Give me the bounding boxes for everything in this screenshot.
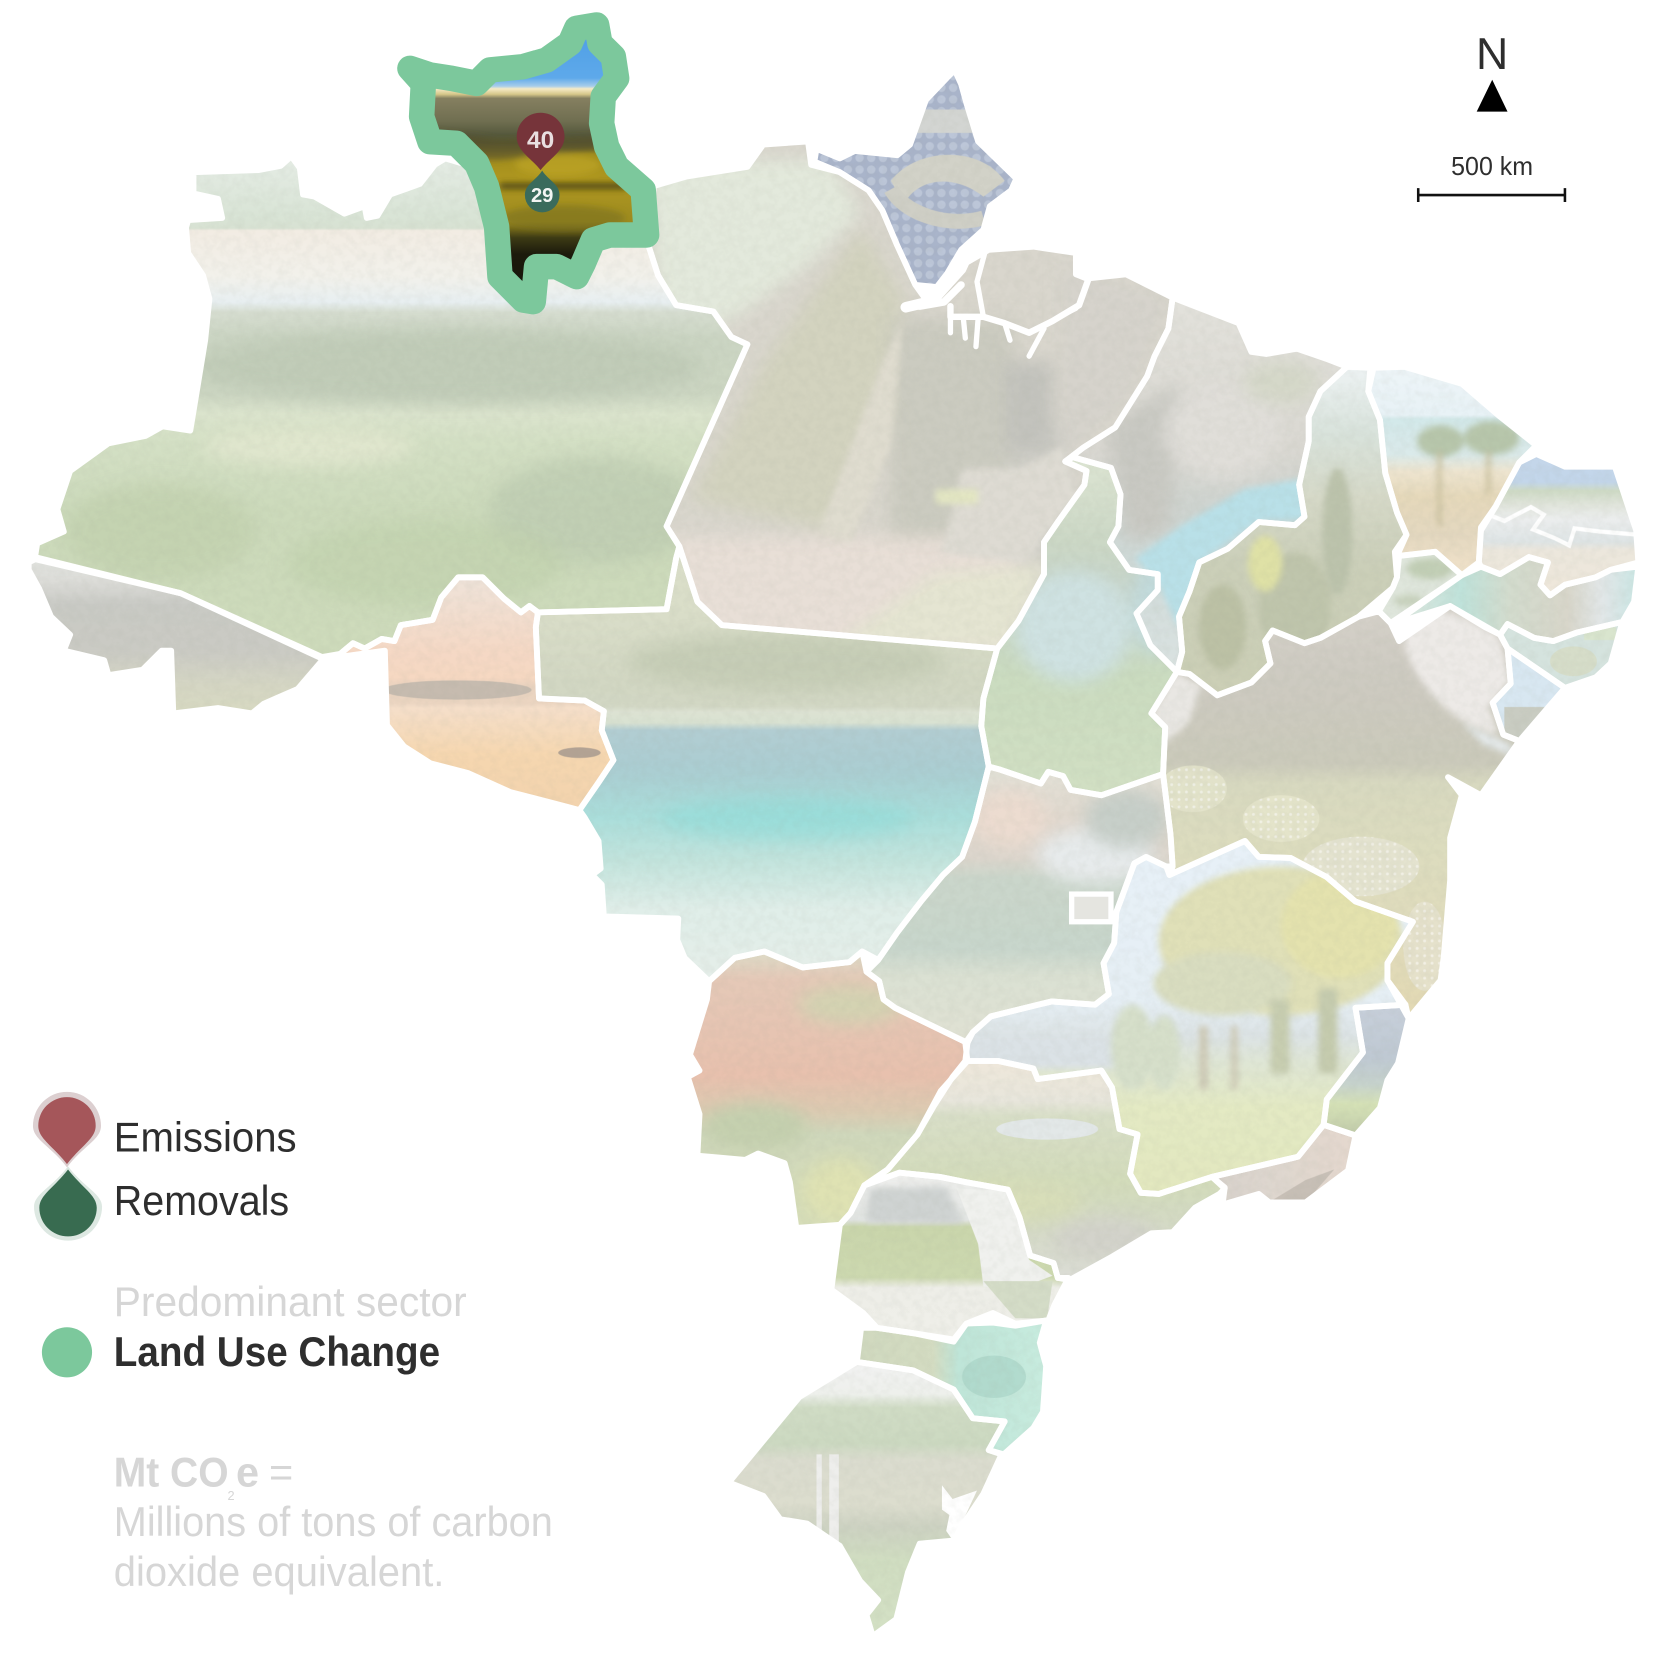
- Roraima green outline: land use change: [410, 25, 647, 302]
- legend: removals: Removals: [114, 1177, 289, 1224]
- Amazon river mouth channels: [906, 238, 1089, 356]
- lagoon in Rio Grande do Sul: [942, 1485, 977, 1542]
- state: Santa Catarina: [851, 1318, 1053, 1462]
- state: Para: [638, 133, 1180, 654]
- legend: land use change: Land Use Change: [114, 1328, 440, 1375]
- Roraima photo: [404, 11, 654, 308]
- state: Tocantins: [984, 460, 1173, 792]
- state: Amazonas: [38, 160, 744, 654]
- state: Mato Grosso do Sul: [692, 954, 964, 1225]
- note: Mt CO2e definition: =: [269, 1448, 293, 1495]
- legend: emissions: Emissions: [114, 1113, 297, 1160]
- pin: emissions 40: 40: [527, 127, 554, 154]
- state: Paraiba: [1410, 560, 1635, 638]
- note: Mt CO2e definition: dioxide equivalent.: [114, 1548, 444, 1595]
- state: Rio de Janeiro: [1207, 1122, 1361, 1207]
- state: Rio Grande do Norte: [1482, 457, 1636, 591]
- state: Rio Grande do Sul: [712, 1359, 1010, 1637]
- pin: removals 29: 29: [531, 185, 553, 207]
- pin: emissions 40: [517, 113, 565, 170]
- note: Mt CO2e definition: 2: [228, 1488, 235, 1503]
- state: Alagoas: [1496, 654, 1560, 738]
- state: Parana: [824, 1169, 1074, 1345]
- state: Mato Grosso: [538, 557, 994, 977]
- state: Roraima highlighted: [404, 11, 654, 308]
- white wave line: [1488, 507, 1638, 545]
- north arrow: N: [1476, 30, 1508, 79]
- state: Minas Gerais: [957, 835, 1419, 1201]
- state: Ceara: [1372, 370, 1532, 572]
- Federal District: [1072, 894, 1111, 922]
- note: Mt CO2e definition: [114, 1448, 553, 1595]
- legend: removals: [34, 1166, 289, 1241]
- note: Mt CO2e definition: e: [236, 1448, 259, 1495]
- scale bar: 500 km: [1451, 153, 1533, 181]
- state: Pernambuco east: [1504, 626, 1618, 684]
- legend: emissions: [33, 1092, 297, 1167]
- state: Rondonia: [346, 580, 610, 807]
- north arrow: [1476, 30, 1508, 112]
- state: Sao Paulo: [861, 1058, 1228, 1286]
- state: Bahia: [1148, 606, 1531, 1023]
- state: Maranhao: [1078, 302, 1342, 666]
- state: Acre: [32, 562, 318, 710]
- state: Pernambuco west: [1382, 555, 1457, 619]
- state: Piaui: [1180, 370, 1403, 692]
- state: Espirito Santo: [1318, 999, 1414, 1138]
- legend: predominant sector heading: Predominant sector: [114, 1278, 467, 1325]
- scale bar: [1418, 153, 1565, 202]
- note: Mt CO2e definition: Millions of tons of carbon: [114, 1498, 553, 1545]
- note: Mt CO2e definition: Mt CO: [114, 1448, 229, 1495]
- state: Goias: [871, 770, 1170, 1038]
- pin: removals 29: [525, 171, 560, 212]
- state: Amapa: [818, 75, 1013, 284]
- legend: [33, 1092, 553, 1595]
